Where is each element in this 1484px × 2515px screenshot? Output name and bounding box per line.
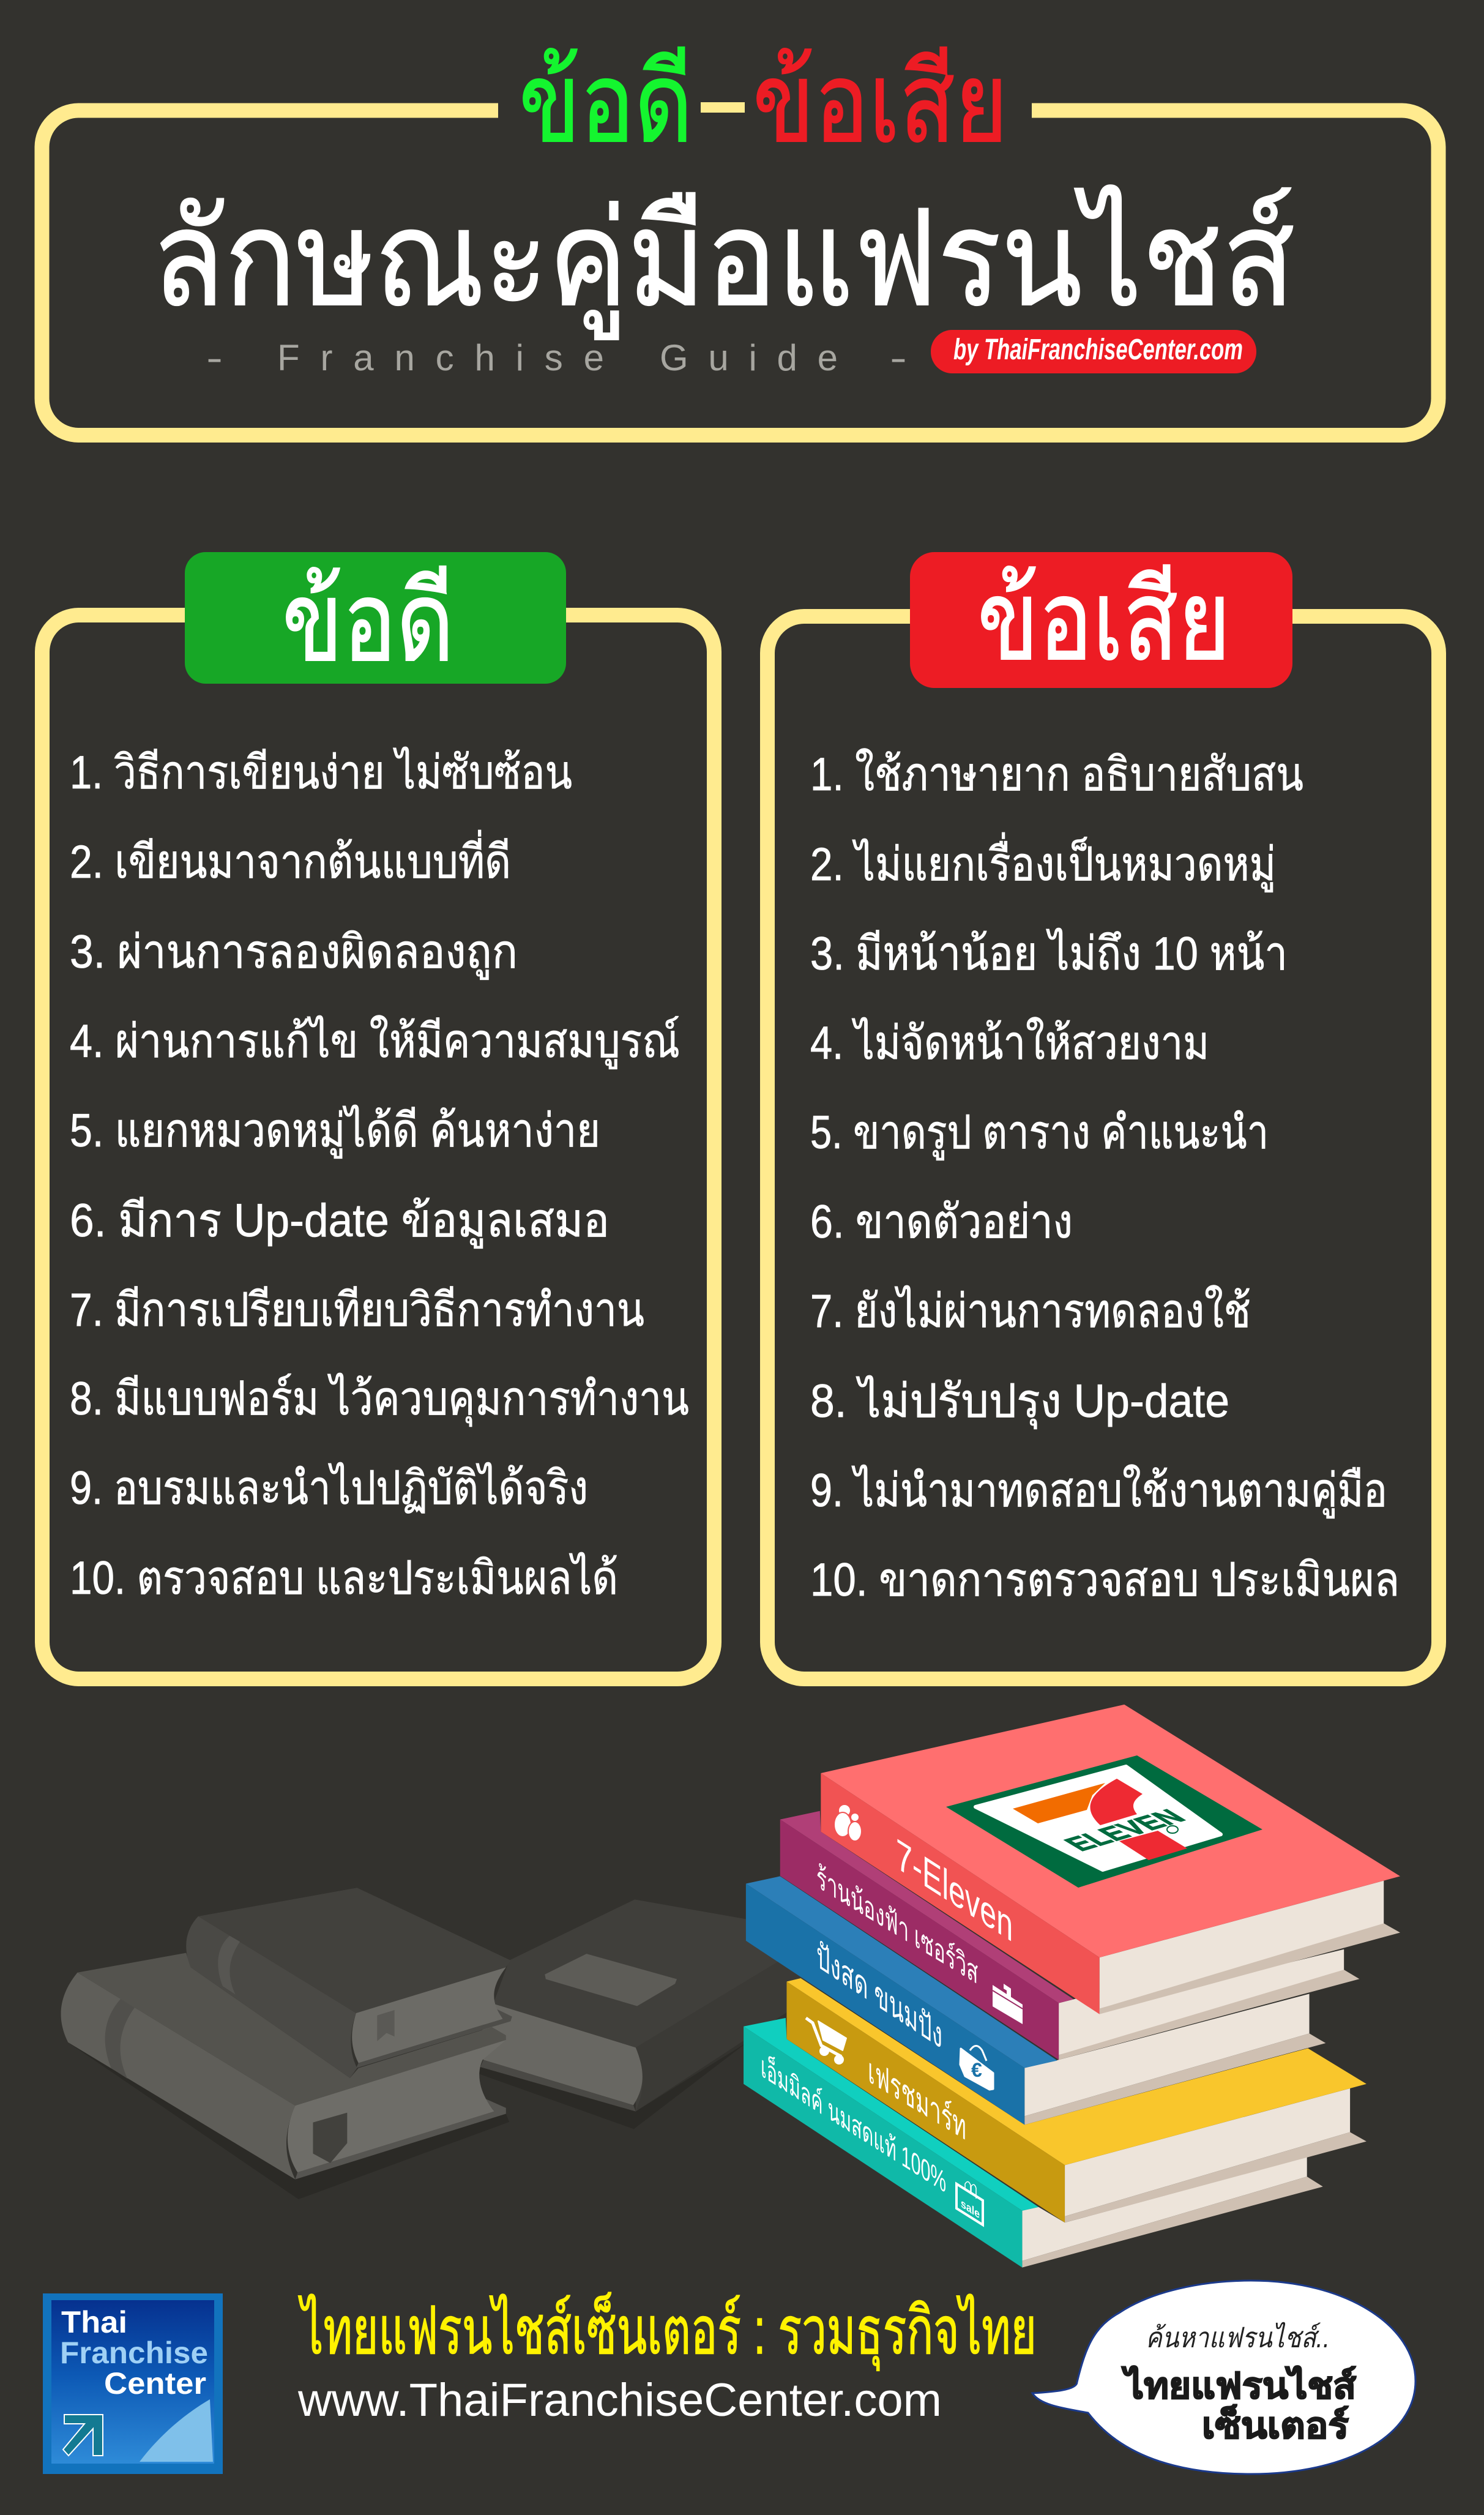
subtitle: -: [206, 337, 223, 378]
cons list: 2. ไม่แยกเรื่องเป็นหมวดหมู่: [810, 832, 1276, 892]
pros list: [70, 746, 689, 1604]
footer heading: ไทยแฟรนไชส์เซ็นเตอร์ : รวมธุรกิจไทย: [298, 2292, 1037, 2371]
speech bubble: ไทยแฟรนไชส์: [1121, 2366, 1357, 2406]
pros heading: ข้อดี: [282, 559, 454, 684]
pros list: 4. ผ่านการแก้ไข ให้มีความสมบูรณ์: [70, 1015, 680, 1069]
pros list: 6. มีการ Up-date ข้อมูลเสมอ: [70, 1195, 610, 1249]
pros list: 1. วิธีการเขียนง่าย ไม่ซับซ้อน: [70, 746, 572, 799]
cons list: 8. ไม่ปรับปรุง Up-date: [810, 1375, 1229, 1429]
logo: Thai Franchise Center: Center: [104, 2366, 206, 2401]
logo: Thai Franchise Center: [43, 2293, 223, 2474]
icon: sale bag: sale: [961, 2197, 980, 2222]
cons list: 5. ขาดรูป ตาราง คำแนะนำ: [810, 1107, 1269, 1160]
badge: by ThaiFranchiseCenter.com: [953, 334, 1243, 366]
logo: 7-Eleven: [946, 1755, 1262, 1888]
book: blue: [746, 1876, 1326, 2124]
header panel: [42, 40, 1438, 435]
cons heading: ข้อเสีย: [977, 558, 1231, 683]
illustration: grey books: [61, 1888, 827, 2199]
icon: shopping cart: [806, 2018, 846, 2065]
title: pros and cons: [519, 40, 1008, 165]
footer: [43, 2281, 1415, 2474]
icon: people: [834, 1804, 862, 1841]
cons list: 3. มีหน้าน้อย ไม่ถึง 10 หน้า: [810, 927, 1288, 980]
speech bubble: เซ็นเตอร์: [1202, 2404, 1349, 2446]
cons list: 9. ไม่นำมาทดสอบใช้งานตามคู่มือ: [810, 1464, 1387, 1519]
header frame: [42, 110, 1438, 435]
icon: euro bag: [960, 2046, 993, 2090]
pros heading: [185, 552, 566, 684]
pros list: 7. มีการเปรียบเทียบวิธีการทำงาน: [70, 1284, 644, 1336]
pros frame: [42, 615, 714, 1679]
main title: ลักษณะคู่มือแฟรนไชส์: [152, 185, 1295, 340]
pros list: 10. ตรวจสอบ และประเมินผลได้: [70, 1552, 618, 1604]
book label: bakery: ปังสด ขนมปัง: [816, 1935, 942, 2057]
badge: [931, 330, 1256, 373]
subtitle: Guide: [660, 337, 838, 378]
pros list: 8. มีแบบฟอร์ม ไว้ควบคุมการทำงาน: [70, 1372, 689, 1427]
speech bubble: [1032, 2281, 1415, 2474]
icon: briefcase: [993, 1984, 1023, 2024]
book: yellow: [786, 1978, 1367, 2222]
icon: sale bag: [956, 2181, 983, 2225]
speech bubble: ค้นหาแฟรนไชส์..: [1146, 2322, 1330, 2353]
book: purple: [780, 1811, 1359, 2060]
cons list: [810, 748, 1400, 1606]
pros list: 3. ผ่านการลองผิดลองถูก: [70, 926, 518, 980]
logo: Thai Franchise Center: Thai: [61, 2305, 127, 2339]
pros list: 2. เขียนมาจากต้นแบบที่ดี: [70, 830, 511, 888]
book: red: [821, 1705, 1400, 2014]
title: pros and cons: ข้อเสีย: [753, 40, 1008, 165]
book: teal: [744, 2018, 1323, 2268]
title: pros and cons: ข้อดี: [519, 40, 693, 165]
cons list: 1. ใช้ภาษายาก อธิบายสับสน: [810, 748, 1303, 801]
subtitle: [206, 337, 907, 378]
illustration: colored book stack: [744, 1705, 1400, 2268]
logo: Thai Franchise Center: Franchise: [60, 2336, 208, 2370]
cons list: 7. ยังไม่ผ่านการทดลองใช้: [810, 1285, 1251, 1337]
book label: fast service: ร้านน้องฟ้า เซอร์วิส: [816, 1859, 978, 1991]
grey book: large bottom: [61, 1953, 509, 2199]
icon: euro bag: €: [971, 2059, 982, 2081]
logo: 7-Eleven: ELEVEN: [1057, 1806, 1193, 1855]
cons frame: [767, 616, 1439, 1679]
cons list: 6. ขาดตัวอย่าง: [810, 1196, 1073, 1248]
grey book: upper: [186, 1888, 512, 2078]
cons list: 10. ขาดการตรวจสอบ ประเมินผล: [810, 1554, 1400, 1606]
book label: 7-Eleven: 7-Eleven: [896, 1829, 1013, 1951]
subtitle: -: [890, 337, 907, 378]
pros list: 9. อบรมและนำไปปฏิบัติได้จริง: [70, 1462, 588, 1514]
pros list: 5. แยกหมวดหมู่ได้ดี ค้นหาง่าย: [70, 1104, 600, 1159]
footer url: www.ThaiFranchiseCenter.com: [297, 2374, 942, 2426]
book label: milk: เอ็มมิลค์ นมสดแท้ 100%: [761, 2048, 946, 2200]
subtitle: Franchise: [277, 337, 604, 378]
grey book: right: [479, 1899, 827, 2129]
cons list: 4. ไม่จัดหน้าให้สวยงาม: [810, 1017, 1209, 1069]
panel: pros: [42, 552, 714, 1679]
panel: cons: [767, 552, 1439, 1679]
book label: fresh mart: เฟรชมาร์ท: [868, 2050, 966, 2148]
